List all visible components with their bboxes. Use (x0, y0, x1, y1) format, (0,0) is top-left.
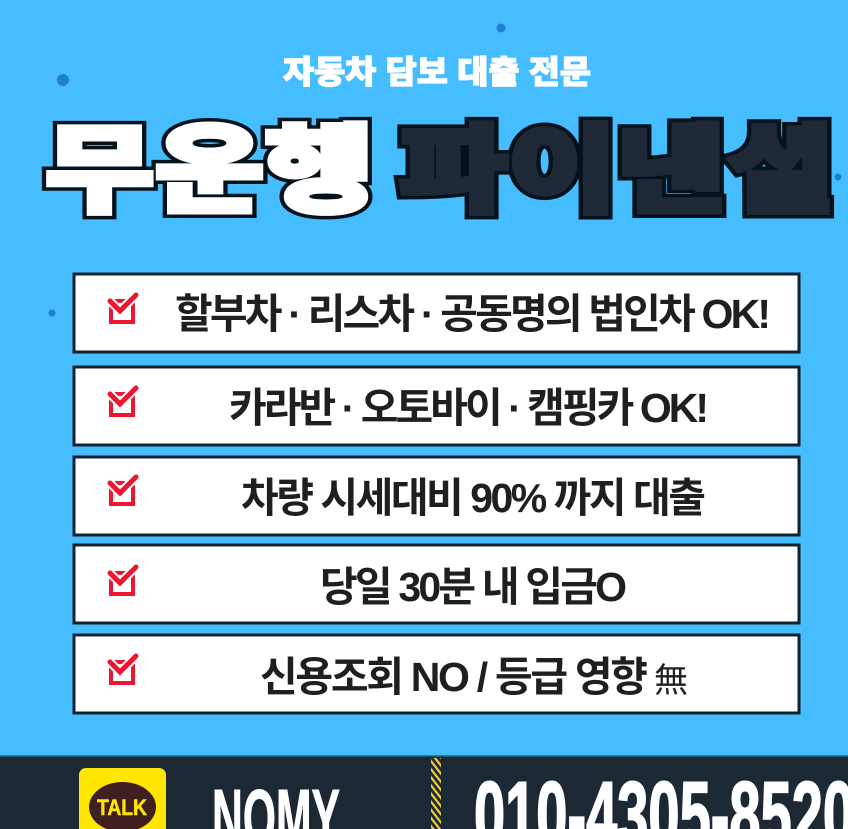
panel: footer (0, 755, 848, 829)
title: white part: 무운행 (45, 118, 374, 225)
decorative dots (48, 24, 842, 316)
icon: KakaoTalk (79, 768, 166, 829)
icon: check (109, 477, 136, 504)
row 1 (74, 274, 799, 352)
row 2: 카라반 · 오토바이 · 캠핑카 OK! (229, 385, 709, 431)
row 2 (74, 367, 799, 445)
subtitle: 자동차 담보 대출 전문 (283, 54, 591, 90)
icon: check (109, 388, 136, 415)
row 3 (74, 457, 799, 535)
icon: check (109, 295, 136, 322)
panel: feature list (74, 274, 799, 713)
title: dark part: 파이낸셜 (399, 118, 835, 225)
row 4: 당일 30분 내 입금O (320, 564, 627, 610)
title: dark part: 파이낸셜 (399, 118, 835, 225)
icon: KakaoTalk: TALK (97, 795, 147, 820)
row 3: 차량 시세대비 90% 까지 대출 (241, 475, 706, 521)
icon: check (109, 567, 136, 594)
title (45, 118, 835, 225)
row 4 (74, 545, 799, 623)
title: white part: 무운행 (45, 118, 374, 225)
row 5: 신용조회 NO / 등급 영향 (260, 654, 648, 700)
hazard divider (431, 758, 441, 829)
icon: check (109, 656, 136, 683)
row 5: 無 (654, 653, 688, 702)
row 5 (74, 635, 799, 713)
row 1: 할부차 · 리스차 · 공동명의 법인차 OK! (175, 291, 771, 337)
